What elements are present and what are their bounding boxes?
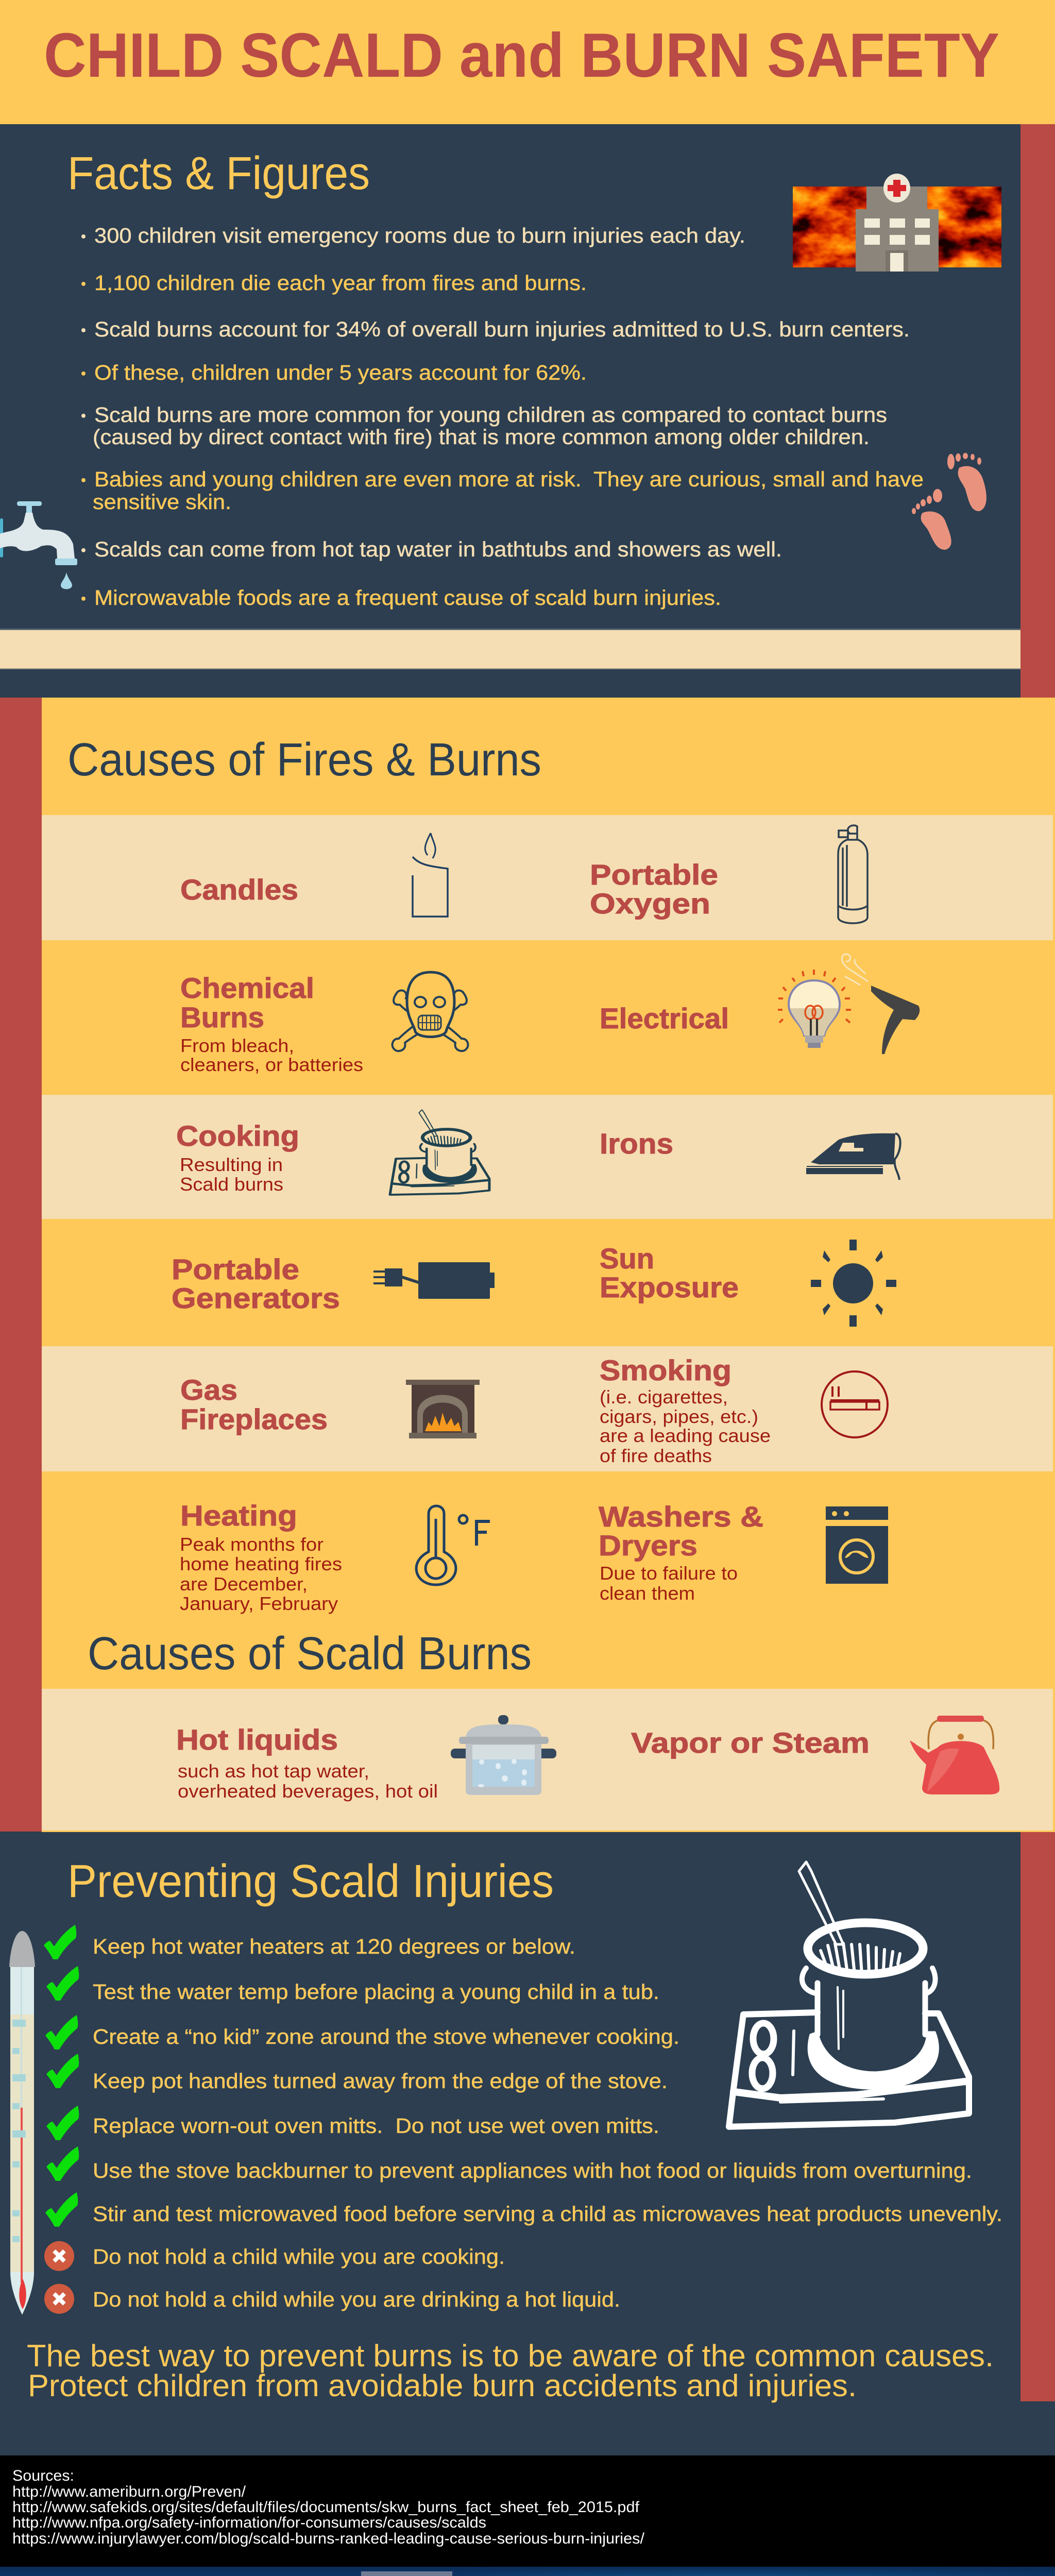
checklist: do items: Stir and test microwaved food before serving a child as microwaves heat products unevenly. <box>93 2202 1002 2226</box>
cause: heating <box>180 1499 342 1614</box>
cause: sun exposure <box>600 1242 739 1303</box>
facts list: Of these, children under 5 years account for 62%. <box>94 361 587 384</box>
facts list: (caused by direct contact with fire) that is more common among older children. <box>93 425 870 449</box>
cause: smoking: Smoking <box>600 1354 731 1386</box>
cause: hot liquids: such as hot tap water, <box>178 1760 369 1782</box>
cause: washers and dryers <box>599 1500 763 1604</box>
closing statement <box>27 2338 994 2403</box>
icon: clothes iron <box>806 1133 900 1180</box>
cause: hot liquids: Hot liquids <box>176 1723 338 1756</box>
checklist: do items: Test the water temp before placing a young child in a tub. <box>93 1980 659 2004</box>
cause: electrical: Electrical <box>600 1002 729 1035</box>
cause: candles: Candles <box>180 873 298 906</box>
checklist: do items: Create a “no kid” zone around the stove whenever cooking. <box>93 2025 679 2048</box>
cause: portable generators: Generators <box>172 1282 340 1314</box>
facts list: Scald burns are more common for young children as compared to contact burns <box>94 403 887 427</box>
facts list <box>81 224 924 609</box>
panel: causes of fires and burns <box>0 698 1055 1832</box>
cause: gas fireplaces: Fireplaces <box>180 1403 328 1435</box>
cause: irons: Irons <box>600 1127 673 1160</box>
cause: sun exposure: Exposure <box>600 1271 739 1303</box>
cause: portable oxygen: Portable <box>590 858 718 891</box>
checklist: do not items: Do not hold a child while you are drinking a hot liquid. <box>93 2287 620 2311</box>
icon: generator with plug <box>373 1262 495 1299</box>
icon: lightbulb and hair dryer <box>778 954 920 1054</box>
heading: preventing scald injuries: Preventing Scald Injuries <box>67 1856 554 1907</box>
icon: cross <box>44 2284 74 2314</box>
cause: vapor or steam: Vapor or Steam <box>631 1726 870 1759</box>
cause: chemical burns: Burns <box>180 1001 264 1033</box>
icon: cross <box>44 2241 74 2271</box>
cause: heating: Heating <box>180 1499 297 1532</box>
facts list: Babies and young children are even more at risk. They are curious, small and have <box>94 467 924 491</box>
cause: gas fireplaces: Gas <box>180 1374 237 1406</box>
icon: baby footprints <box>912 453 986 550</box>
panel: sources: https://www.injurylawyer.com/blog/scald-burns-ranked-leading-cause-serious-burn-injuries/ <box>12 2530 645 2547</box>
facts list: Scalds can come from hot tap water in bathtubs and showers as well. <box>94 537 782 561</box>
icon: check <box>44 1925 76 1959</box>
cause: cooking: Resulting in <box>180 1154 283 1175</box>
icon: skull and crossbones <box>393 972 468 1051</box>
title: CHILD SCALD and BURN SAFETY <box>44 20 999 90</box>
icon: fireplace <box>406 1380 480 1438</box>
checklist: do items: Keep pot handles turned away from the edge of the stove. <box>93 2069 668 2093</box>
icon: check <box>46 2146 79 2181</box>
cause: smoking <box>600 1354 771 1466</box>
cause: hot liquids <box>176 1723 438 1802</box>
cause: smoking: (i.e. cigarettes, <box>600 1386 728 1408</box>
checklist: do not items <box>44 2241 620 2314</box>
icon: washing machine <box>826 1506 888 1584</box>
heading: facts and figures: Facts & Figures <box>67 148 370 199</box>
icon: check <box>45 2192 78 2227</box>
cause: portable oxygen: Oxygen <box>590 887 710 920</box>
icon: sun <box>811 1240 896 1327</box>
cause: smoking: cigars, pipes, etc.) <box>600 1406 758 1427</box>
cause: portable generators <box>172 1253 340 1314</box>
icon: large pot on stove <box>729 1862 969 2127</box>
icon: pot on stove <box>390 1110 489 1195</box>
cause: chemical burns <box>180 972 363 1075</box>
cause: sun exposure: Sun <box>600 1242 654 1275</box>
icon: red kettle <box>910 1716 999 1794</box>
facts list: Scald burns account for 34% of overall burn injuries admitted to U.S. burn centers. <box>94 317 910 341</box>
facts list: sensitive skin. <box>93 490 231 514</box>
cause: hot liquids: overheated beverages, hot oil <box>178 1781 438 1802</box>
facts list: 1,100 children die each year from fires and burns. <box>94 271 587 295</box>
cause: washers and dryers: Due to failure to <box>600 1563 738 1584</box>
cause: gas fireplaces <box>180 1374 328 1435</box>
cause: chemical burns: Chemical <box>180 972 314 1004</box>
panel: sources: Sources: <box>12 2467 74 2484</box>
checklist: do items: Keep hot water heaters at 120 degrees or below. <box>93 1935 575 1958</box>
cause: heating: are December, <box>180 1573 308 1595</box>
cause: washers and dryers: clean them <box>600 1583 695 1604</box>
icon: cigarette in circle <box>822 1371 888 1437</box>
cause: washers and dryers: Dryers <box>599 1529 697 1562</box>
cause: chemical burns: From bleach, <box>180 1035 294 1056</box>
cause: smoking: of fire deaths <box>600 1445 712 1466</box>
panel: sources: http://www.nfpa.org/safety-information/for-consumers/causes/scalds <box>12 2514 486 2531</box>
closing statement: The best way to prevent burns is to be aware of the common causes. <box>27 2338 994 2373</box>
cause: washers and dryers: Washers & <box>599 1500 763 1533</box>
panel: facts and figures <box>0 124 1055 698</box>
panel: sources: http://www.ameriburn.org/Preven/ <box>12 2483 246 2500</box>
cause: portable oxygen <box>590 858 718 920</box>
checklist: do items <box>44 1925 1002 2227</box>
icon: thermometer in Fahrenheit <box>416 1506 490 1585</box>
cause: heating: January, February <box>180 1593 338 1614</box>
cause: portable generators: Portable <box>172 1253 299 1285</box>
cause: chemical burns: cleaners, or batteries <box>180 1054 363 1075</box>
icon: candle <box>413 833 448 917</box>
icon: dripping faucet <box>0 501 77 589</box>
facts list: Microwavable foods are a frequent cause of scald burn injuries. <box>94 586 721 609</box>
icon: oxygen tank <box>838 825 867 923</box>
cause: cooking <box>176 1120 299 1195</box>
cause: cooking: Scald burns <box>180 1174 283 1195</box>
checklist: do not items: Do not hold a child while you are cooking. <box>93 2245 505 2268</box>
icon: check <box>46 1966 79 2001</box>
cause: heating: home heating fires <box>180 1553 342 1574</box>
panel: law firm footer <box>0 2553 1055 2576</box>
closing statement: Protect children from avoidable burn accidents and injuries. <box>28 2368 857 2403</box>
icon: boiling pot <box>451 1715 556 1795</box>
panel: sources <box>0 2455 1055 2567</box>
icon: tall thermometer <box>9 1931 35 2315</box>
heading: causes of fires and burns: Causes of Fires & Burns <box>67 734 541 786</box>
panel: title banner <box>0 0 1055 124</box>
icon: check <box>46 2054 79 2088</box>
panel: preventing scald injuries <box>0 1831 1055 2455</box>
heading: causes of scald burns: Causes of Scald Burns <box>88 1628 532 1680</box>
icon: check <box>45 2015 78 2049</box>
panel: sources: http://www.safekids.org/sites/default/files/documents/skw_burns_fact_sheet_feb_2015.pdf <box>12 2499 640 2516</box>
cause: heating: Peak months for <box>180 1534 324 1555</box>
checklist: do items: Replace worn-out oven mitts. Do not use wet oven mitts. <box>93 2114 659 2138</box>
icon: hospital with flames <box>793 174 1001 272</box>
checklist: do items: Use the stove backburner to prevent appliances with hot food or liquids from overturning. <box>93 2159 972 2182</box>
cause: cooking: Cooking <box>176 1120 299 1152</box>
icon: check <box>46 2106 79 2140</box>
facts list: 300 children visit emergency rooms due to burn injuries each day. <box>94 224 745 247</box>
cause: smoking: are a leading cause <box>600 1425 771 1446</box>
